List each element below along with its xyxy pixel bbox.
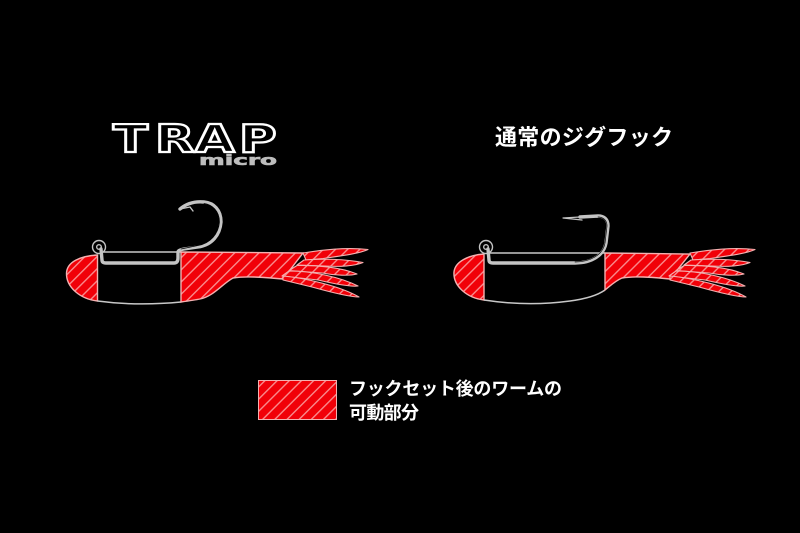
legend <box>258 379 562 423</box>
worm head movable area <box>66 255 98 301</box>
legend swatch <box>258 380 336 420</box>
logo: TRAP micro: P <box>239 117 277 161</box>
legend text: 可動部分 <box>349 403 419 423</box>
worm head movable area <box>454 254 484 300</box>
worm fixed middle section <box>484 253 605 304</box>
logo: TRAP micro: R <box>155 117 194 161</box>
worm fixed middle section <box>98 252 181 304</box>
lure: standard jig hook <box>454 216 755 304</box>
worm tails <box>282 249 368 297</box>
logo: TRAP micro: micro <box>199 153 278 169</box>
hook <box>92 202 221 263</box>
logo: TRAP micro: A <box>195 117 235 161</box>
legend text: フックセット後のワームの <box>349 379 562 399</box>
legend text <box>349 379 562 423</box>
logo: TRAP micro <box>113 117 278 169</box>
worm rear movable area <box>605 253 690 290</box>
hook <box>480 216 608 263</box>
worm tails <box>669 249 755 297</box>
lure: TRAP micro <box>66 202 368 304</box>
logo: TRAP micro: T <box>113 117 148 161</box>
heading: standard jig hook: 通常のジグフック <box>495 125 673 150</box>
worm rear movable area <box>181 252 303 302</box>
